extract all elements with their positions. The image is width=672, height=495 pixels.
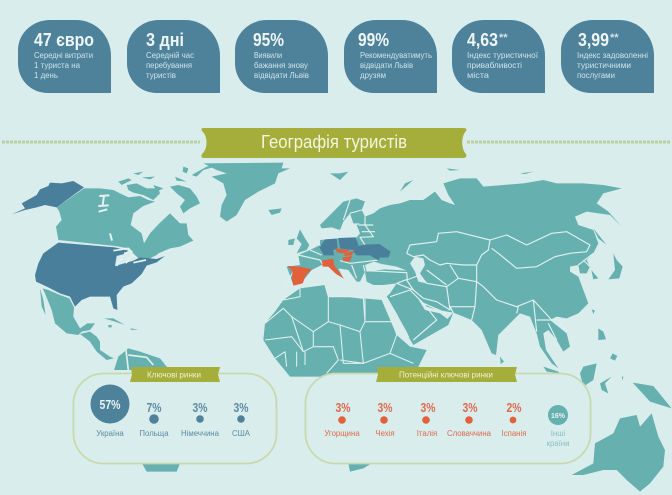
stat card: 47 євро: Середні витрати — [34, 50, 93, 60]
market: Іспанія — [502, 400, 526, 438]
panel: potential key markets — [306, 367, 590, 464]
Australia — [572, 413, 665, 492]
market: other countries: 16% — [551, 413, 566, 420]
stat card: 3,99: Індекс задоволенні — [577, 50, 648, 60]
Scandinavia — [320, 198, 365, 230]
UK and Ireland — [288, 229, 309, 253]
Greenland — [203, 163, 290, 222]
stat card: 3,99: туристичними — [577, 60, 631, 70]
Czech Republic — [335, 249, 350, 254]
stat card: 47 євро: 1 день — [34, 70, 58, 80]
market: Словаччина: Словаччина — [447, 429, 492, 438]
market: Іспанія: 2% — [506, 400, 522, 415]
stat card: 4,63: привабливості — [467, 60, 522, 70]
stat card: 3,99: 3,99 — [578, 30, 609, 50]
stat card: 99% — [344, 20, 437, 93]
stat card: 47 євро: 47 євро — [34, 30, 94, 50]
panel heading — [376, 367, 517, 382]
world map — [12, 163, 672, 492]
Poland — [338, 237, 359, 250]
stat card: 47 євро: 1 туриста на — [34, 60, 80, 70]
title banner — [201, 128, 466, 158]
market: Україна: 57% — [100, 397, 121, 412]
market: Польща: 7% — [146, 400, 162, 415]
Italy — [322, 259, 344, 279]
stat card: 95%: бажання знову — [254, 60, 309, 70]
Indonesia and Malaysia — [543, 363, 623, 393]
stat card: 3 дні: перебування — [146, 60, 192, 70]
market: Іспанія: Іспанія — [502, 429, 526, 438]
stat card: 4,63: Індекс туристичної — [467, 50, 539, 60]
Great Lakes — [113, 248, 146, 266]
market: Польща: Польща — [139, 429, 169, 438]
panel heading: Потенційні ключові ринки — [399, 370, 493, 380]
market: Україна — [90, 384, 130, 438]
stat card: 4,63: 4,63 — [467, 30, 498, 50]
stat card: 4,63: міста — [467, 70, 489, 80]
Asian islands — [330, 168, 623, 364]
stat card: 3,99 — [561, 20, 654, 93]
stat card: 3 дні: 3 дні — [146, 30, 184, 50]
stat card: 4,63 — [452, 20, 545, 93]
market: Італія: 3% — [420, 400, 436, 415]
stat card: 4,63: ** — [499, 32, 508, 44]
panel: key markets — [74, 367, 276, 464]
Germany — [319, 239, 338, 255]
market: Німеччина: 3% — [192, 400, 208, 415]
market: Італія: Італія — [417, 429, 437, 438]
stat card: 47 євро — [18, 20, 111, 93]
market: Чехія — [375, 400, 395, 438]
stat card: 3 дні: туристів — [146, 70, 176, 80]
panel heading: Ключові ринки — [147, 370, 201, 380]
stat card: 3 дні: Середній час — [146, 50, 195, 60]
Spain — [288, 266, 312, 286]
market: other countries: країни — [547, 439, 569, 448]
stat card: 3,99: послугами — [577, 70, 615, 80]
market: США — [232, 400, 251, 438]
market: other countries: Інші — [551, 429, 565, 438]
South Africa tip — [348, 463, 372, 472]
stat card: 3,99: ** — [610, 32, 619, 44]
stat card: 99%: друзям — [360, 70, 386, 80]
New Guinea — [633, 383, 672, 408]
Black Sea and Caspian Sea — [365, 257, 427, 283]
stat card: 95%: відвідати Львів — [254, 70, 309, 80]
market: Польща — [139, 400, 169, 438]
stat card: 95%: Виявили — [254, 50, 282, 60]
market: Україна: Україна — [96, 429, 124, 438]
stat card: 3 дні — [127, 20, 220, 93]
country borders — [287, 200, 593, 340]
Red Sea and Persian Gulf — [382, 297, 453, 337]
market: Словаччина: 3% — [462, 400, 478, 415]
market: Угорщина: Угорщина — [324, 429, 360, 438]
stat card: 99%: відвідати Львів — [360, 60, 413, 70]
stat card: 99%: 99% — [358, 30, 389, 50]
Canada — [56, 188, 193, 260]
market: Угорщина — [324, 400, 360, 438]
stat card: 99%: Рекомендуватимуть — [360, 50, 432, 60]
Africa — [263, 285, 427, 377]
market: other countries — [547, 405, 569, 448]
market: США: США — [232, 429, 251, 438]
Canadian lakes — [98, 195, 112, 241]
Alaska — [12, 181, 84, 214]
Caribbean — [104, 318, 138, 330]
Ukraine — [353, 244, 391, 261]
market: Чехія: 3% — [378, 400, 393, 415]
market: Угорщина: 3% — [336, 400, 351, 415]
stat card: 95%: 95% — [253, 30, 284, 50]
Iceland — [268, 208, 282, 215]
market: Чехія: Чехія — [375, 429, 395, 438]
Central America — [80, 332, 114, 360]
USA — [35, 243, 165, 310]
panel heading — [130, 367, 220, 382]
market: Італія — [417, 400, 437, 438]
South America — [114, 348, 167, 370]
stat card: 95% — [235, 20, 328, 93]
Arctic islands — [118, 163, 227, 213]
South America below panel — [142, 463, 180, 472]
Mexico — [40, 288, 95, 335]
map: Eurasia, Africa, Australia — [263, 168, 672, 492]
Eurasia — [287, 178, 622, 368]
market: Словаччина — [447, 400, 492, 438]
market: Німеччина: Німеччина — [181, 429, 220, 438]
market: Німеччина — [181, 400, 220, 438]
Slovakia and Hungary — [343, 251, 354, 261]
title banner: Географія туристів — [261, 131, 407, 152]
map: Americas — [12, 163, 290, 472]
market: США: 3% — [234, 400, 249, 415]
